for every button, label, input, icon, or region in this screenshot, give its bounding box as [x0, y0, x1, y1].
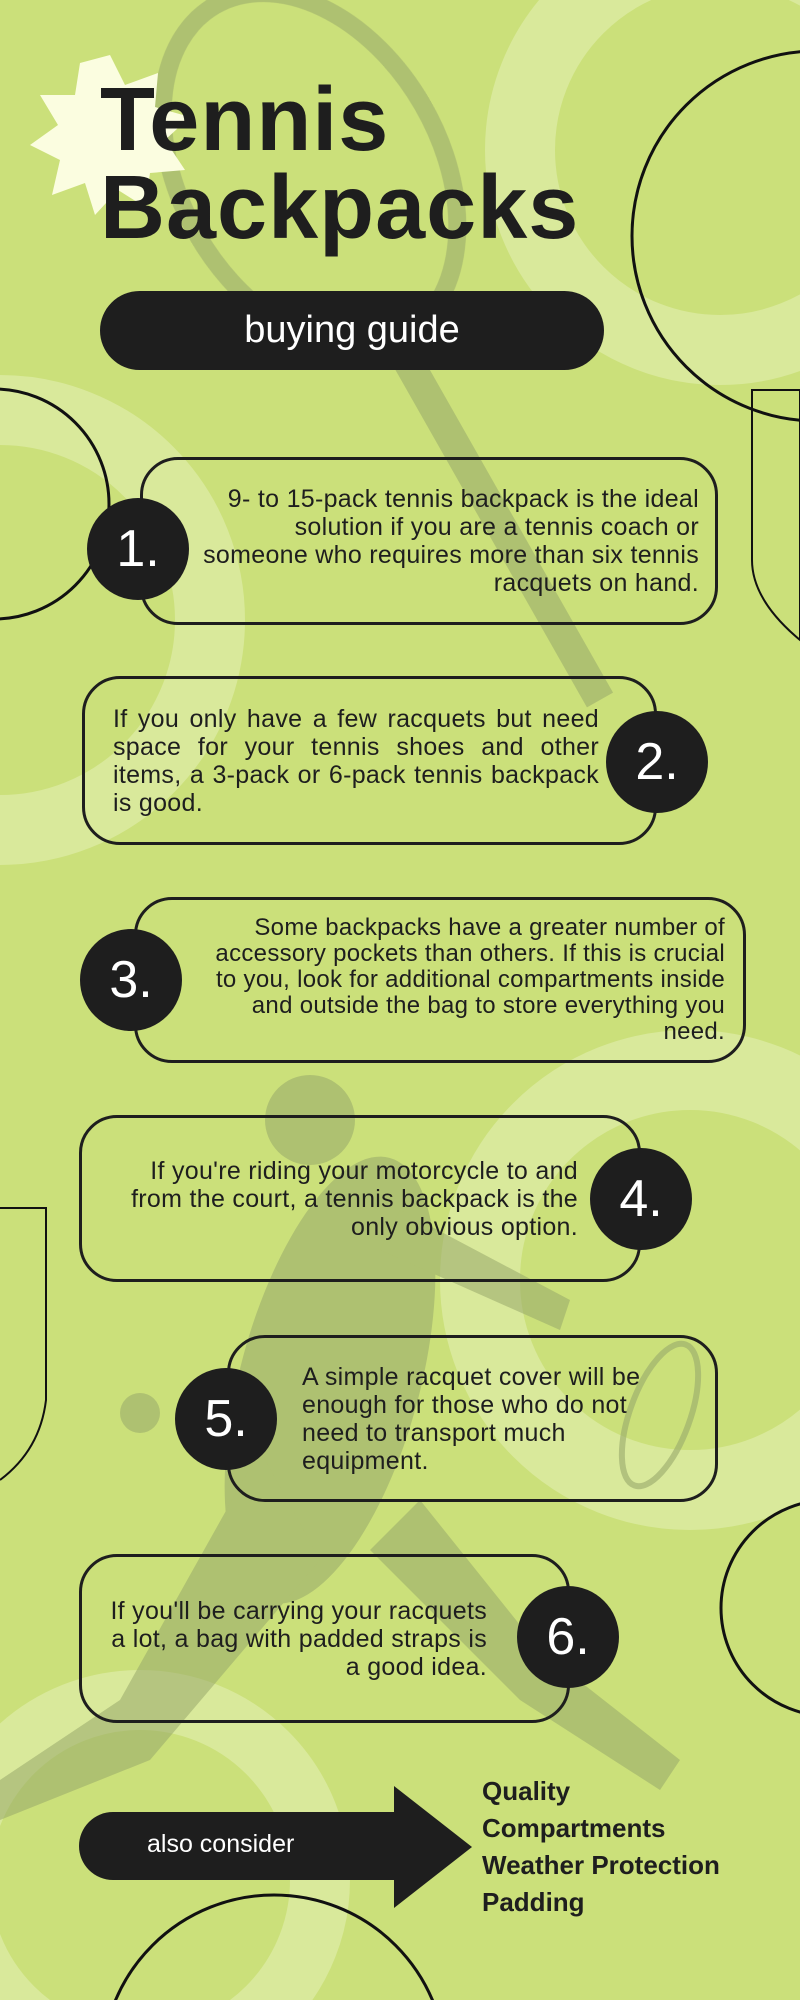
number 3 [80, 929, 182, 1031]
also consider list: Padding [482, 1887, 585, 1917]
title: Backpacks [100, 158, 579, 258]
racquet silhouette [102, 0, 600, 700]
item 4 [79, 1115, 641, 1282]
subtitle pill: buying guide [244, 309, 460, 351]
number 5 [175, 1368, 277, 1470]
also consider list: Quality [482, 1776, 570, 1806]
also consider list: Compartments [482, 1813, 665, 1843]
item 2: If you only have a few racquets but need space for your tennis shoes and other items, a 3-pack or 6-pack tennis backpack is good. [113, 704, 599, 816]
number 2: 2. [635, 733, 679, 791]
number 4: 4. [619, 1170, 663, 1228]
item 5: A simple racquet cover will be enough for those who do not need to transport much equipment. [302, 1362, 640, 1474]
item 2 [82, 676, 657, 845]
number 1: 1. [116, 520, 160, 578]
also consider list [482, 1776, 720, 1917]
item 5 [227, 1335, 718, 1502]
title [100, 70, 579, 258]
item 3: Some backpacks have a greater number of accessory pockets than others. If this is crucial to you, look for additional compartments inside and outside the bag to store everything you need. [215, 914, 725, 1045]
item 1 [140, 457, 718, 625]
subtitle pill [100, 291, 604, 370]
number 2 [606, 711, 708, 813]
starburst [30, 55, 603, 344]
item 6 [79, 1554, 570, 1723]
number 4 [590, 1148, 692, 1250]
item 4: If you're riding your motorcycle to and from the court, a tennis backpack is the only obvious option. [131, 1156, 578, 1240]
also consider list: Weather Protection [482, 1850, 720, 1880]
number 5: 5. [204, 1390, 248, 1448]
number 1 [87, 498, 189, 600]
item 1: 9- to 15-pack tennis backpack is the ideal solution if you are a tennis coach or someone who requires more than six tennis racquets on hand. [203, 485, 699, 597]
number 6 [517, 1586, 619, 1688]
number 6: 6. [546, 1608, 590, 1666]
item 3 [134, 897, 746, 1063]
number 3: 3. [109, 951, 153, 1009]
title: Tennis [100, 70, 389, 170]
arrow: also consider [79, 1786, 472, 1908]
item 6: If you'll be carrying your racquets a lot, a bag with padded straps is a good idea. [110, 1596, 487, 1680]
arrow: also consider: also consider [147, 1830, 294, 1858]
